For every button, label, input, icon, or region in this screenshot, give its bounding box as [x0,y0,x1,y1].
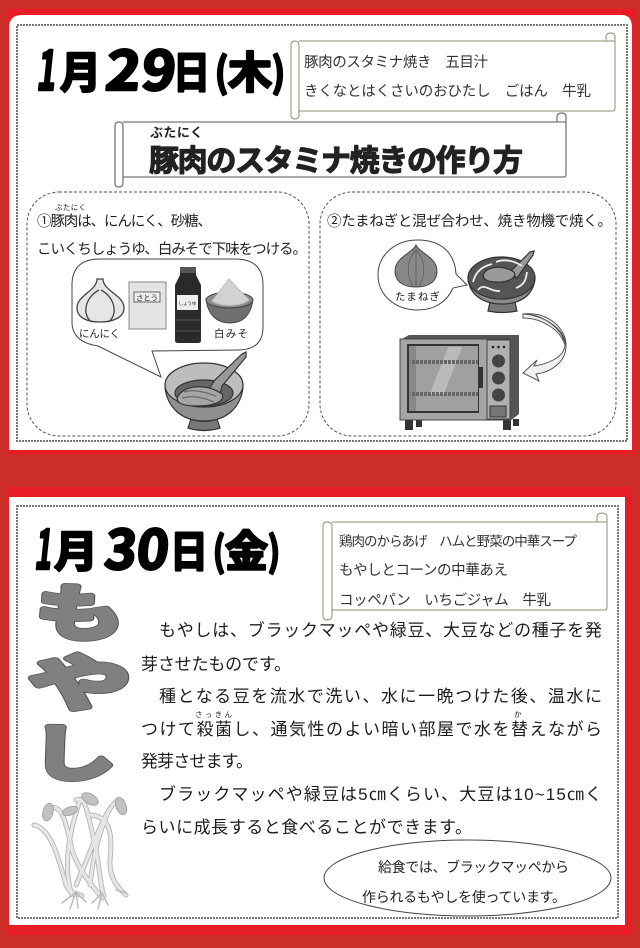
icon: soy sauce bottle: しょうゆ [178,301,197,307]
icon: soy sauce bottle [175,267,201,343]
callout oval: 給食では、ブラックマッペから [378,859,569,875]
date heading: January 30 Friday: ( [213,520,225,578]
body text: about moyashi: さっきん [195,710,232,719]
body text: about moyashi: もやしは、ブラックマッペや緑豆、大豆などの種子を発 [159,620,602,640]
recipe heading scroll: 豚肉のスタミナ焼きの作り方 [149,136,523,180]
icon: bowl with pork and onion [468,251,535,312]
date heading: January 29 Thursday: 9 [138,27,181,106]
date heading: January 30 Friday: 日 [170,518,208,580]
body text: about moyashi: 発芽させます。 [141,752,253,771]
icon: garlic [77,279,124,322]
date heading: January 29 Thursday: 2 [102,27,146,106]
icon: white miso bowl [206,279,253,323]
date heading: January 30 Friday: 1 [32,506,58,585]
icon: onion [395,245,437,287]
icon: bean sprouts [34,790,129,909]
speech bubble: onion [378,240,467,310]
menu scroll: January 29 [291,33,615,119]
step 2 panel [320,192,616,436]
icon: toaster oven [400,335,519,430]
menu scroll: January 30: 鶏肉のからあげ ハムと野菜の中華スープ [339,534,578,549]
date heading: January 29 Thursday: 木 [228,39,272,101]
date heading: January 30 Friday: 月 [54,518,98,580]
callout oval [324,840,611,916]
body text: about moyashi: ブラックマッペや緑豆は5㎝くらい、大豆は10~15㎝く [159,784,602,804]
vertical title: moyashi: も [36,566,124,653]
icon: sugar bag [129,282,166,329]
date heading: January 30 Friday: 金 [225,518,268,580]
icon: sugar bag: さとう [136,294,158,302]
menu scroll: January 30 [323,513,607,620]
vertical title: moyashi: し [31,706,116,793]
menu scroll: January 30: もやしとコーンの中華あえ [339,562,508,579]
date heading: January 29 Thursday [34,27,285,106]
panel: January 30 [8,487,632,935]
vertical title: moyashi: も [36,566,124,653]
vertical title: moyashi [29,566,131,793]
icon: bowl with marinated pork [165,352,246,430]
vertical title: moyashi: や [29,636,131,723]
date heading: January 30 Friday: 3 [101,506,142,585]
date heading: January 30 Friday: ) [268,520,280,578]
label: white miso: 白みそ [214,327,248,340]
panel: January 29 [8,9,636,454]
step 2 text: ②たまねぎと混ぜ合わせ、焼き物機で焼く。 [327,213,612,230]
label: onion: たまねぎ [395,290,440,303]
date heading: January 29 Thursday: 日 [173,39,210,101]
step 1 text: こいくちしょうゆ、白みそで下味をつける。 [37,241,307,258]
recipe heading scroll: ぶたにく [150,125,203,140]
date heading: January 30 Friday [32,506,280,585]
body text: about moyashi: らいに成長すると食べることができます。 [141,818,472,837]
menu scroll: January 29: きくなとはくさいのおひたし ごはん 牛乳 [304,83,591,100]
step 1 text: ①豚肉は、にんにく、砂糖、 [37,213,212,230]
body text: about moyashi: つけて殺菌し、通気性のよい暗い部屋で水を替えながら [141,720,602,739]
recipe heading scroll [115,113,566,187]
callout oval: 作られるもやしを使っています。 [362,889,566,905]
date heading: January 29 Thursday: ( [215,41,228,99]
body text: about moyashi: 種となる豆を流水で洗い、水に一晩つけた後、温水に [159,687,602,706]
body text: about moyashi: 芽させたものです。 [141,655,291,674]
body text: about moyashi: か [514,710,522,719]
step 1 text [37,203,307,258]
vertical title: moyashi: し [31,706,116,793]
body text: about moyashi [141,620,602,837]
speech bubble: ingredients [72,259,263,377]
date heading: January 29 Thursday: ) [272,41,285,99]
step 1 panel [27,192,309,436]
date heading: January 29 Thursday: 1 [34,27,62,106]
menu scroll: January 30: コッペパン いちごジャム 牛乳 [339,592,551,609]
menu scroll: January 29: 豚肉のスタミナ焼き 五目汁 [304,54,488,71]
step 1 text: ぶたにく [55,203,86,212]
arrow: bowl to oven [523,314,566,381]
date heading: January 29 Thursday: 月 [60,39,101,101]
date heading: January 30 Friday: 0 [133,506,174,585]
label: garlic: にんにく [79,328,120,340]
vertical title: moyashi: や [29,636,131,723]
